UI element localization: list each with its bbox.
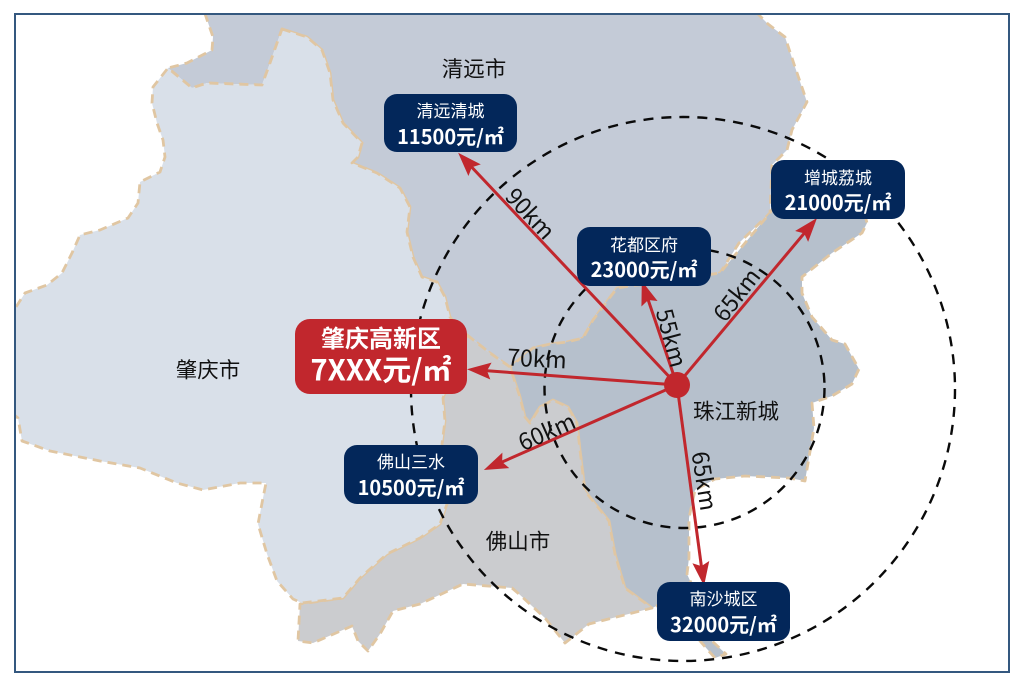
arrow: to Nansha: [677, 385, 703, 576]
price tag: Nansha: [657, 582, 790, 641]
arrows from Zhujiang New Town: [465, 160, 811, 576]
price tag: Foshan Sanshui: [344, 445, 478, 504]
arrow: to Zengcheng: [677, 226, 811, 385]
price tag: Nansha: 南沙城区: [690, 585, 758, 610]
arrow: to Qingyuan: [465, 160, 677, 385]
price tag: Zengcheng Licheng: 增城荔城: [804, 164, 872, 189]
price tag: Foshan Sanshui: 佛山三水: [377, 448, 445, 473]
price tag: Qingyuan Qingcheng: 清远清城: [416, 97, 484, 122]
map of regions: [8, 8, 867, 658]
arrow: to Zhaoqing: [477, 370, 677, 385]
arrow: to Sanshui: [493, 385, 677, 466]
region: Foshan: [298, 335, 652, 651]
price tag: Foshan Sanshui: 10500元/㎡: [358, 472, 464, 501]
price tag: Huadu: 花都区府: [610, 231, 678, 256]
region: Zhaoqing: [8, 29, 467, 603]
price tag: Qingyuan Qingcheng: [384, 94, 517, 152]
place label: Zhujiang New Town: 珠江新城: [693, 395, 779, 426]
price tag: Qingyuan Qingcheng: 11500元/㎡: [397, 121, 504, 150]
city label: Qingyuan: 清远市: [442, 52, 506, 84]
price tag: Zengcheng Licheng: [771, 160, 905, 219]
distance: 60km: 60km: [512, 403, 580, 458]
city label: Zhaoqing: 肇庆市: [176, 354, 240, 384]
distance: lower 65km: 65km: [685, 449, 727, 513]
price tag: Zhaoqing High-tech Zone: 7XXX元/㎡: [311, 348, 451, 390]
arrow: to Huadu: [645, 290, 677, 385]
region: Guangzhou: [510, 195, 867, 658]
region: Qingyuan: [168, 8, 807, 367]
distance: 55km: 55km: [649, 304, 697, 371]
distance: 70km: 70km: [506, 338, 568, 376]
price tag: Huadu: 23000元/㎡: [591, 254, 697, 283]
distance rings: [411, 117, 955, 661]
price tag: Zengcheng Licheng: 21000元/㎡: [785, 187, 891, 216]
center point: Zhujiang New Town: [664, 372, 690, 398]
distance: upper 65km: 65km: [704, 260, 767, 328]
price tag: Huadu: [577, 227, 711, 286]
price tag: Zhaoqing High-tech Zone: 肇庆高新区: [321, 319, 441, 354]
price tag: Zhaoqing High-tech Zone: [295, 319, 467, 394]
city label: Foshan: 佛山市: [486, 525, 550, 556]
price tag: Nansha: 32000元/㎡: [670, 609, 777, 638]
distance: 90km: 90km: [499, 179, 564, 246]
